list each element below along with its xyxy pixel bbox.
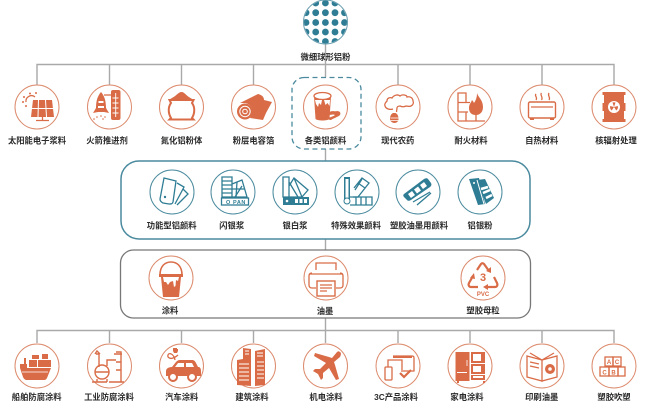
item: plastic toys: C	[602, 370, 607, 376]
item: printing ink	[520, 344, 564, 402]
item: fire resistant material: 耐火材料	[454, 136, 488, 146]
item: solar paste	[8, 85, 67, 146]
item: flash silver paste: 闪银浆	[219, 220, 245, 230]
item: aluminium nitride powder: 氮化铝粉体	[161, 136, 203, 146]
item: functional aluminium pigment: 功能型铝颜料	[147, 220, 197, 230]
item: home appliance coating: 家电涂料	[450, 392, 484, 402]
item: plastic and ink pigment: 塑胶油墨用颜料	[390, 220, 449, 230]
item: functional aluminium pigment	[147, 170, 197, 230]
item: architectural coating: 建筑涂料	[235, 392, 269, 402]
item: automotive coating: 汽车涂料	[165, 392, 199, 402]
item: PVC recycling: 塑胶母粒	[466, 306, 500, 316]
item: special effect pigment: 特殊效果颜料	[331, 220, 382, 230]
item: flash silver paste	[211, 170, 255, 230]
item: marine anticorrosive coating	[12, 344, 62, 402]
item: home appliance coating	[448, 344, 492, 402]
item: ink printer	[304, 256, 348, 316]
item: automotive coating	[160, 344, 204, 402]
item: rocket propellant	[86, 85, 132, 146]
panel: application media	[120, 250, 530, 318]
root node: spherical aluminium powder	[303, 0, 348, 45]
icon: sphere dots	[303, 0, 348, 45]
item: self-heating material: 自热材料	[525, 136, 559, 146]
callout: highlighted pigment category	[292, 78, 361, 149]
item: aluminium silver powder: 铝银粉	[468, 220, 493, 230]
item: PVC recycling: PVC	[477, 292, 490, 298]
item: silver white paste: 银白浆	[283, 220, 308, 230]
item: aluminium silver powder	[458, 170, 502, 230]
item: powder layer capacitor foil	[232, 85, 276, 146]
item: architectural coating	[232, 344, 276, 402]
item: nuclear radiation treatment	[592, 85, 637, 146]
item: plastic toys: 塑胶吹塑	[597, 392, 631, 402]
item: coating bucket	[149, 256, 193, 316]
item: 3C product coating: 3C产品涂料	[374, 392, 419, 402]
item: special effect pigment	[331, 170, 382, 230]
item: pigments	[304, 85, 348, 146]
item: plastic toys: C	[615, 360, 620, 366]
title: 微细球形铝粉	[301, 52, 351, 62]
item: plastic toys: B	[611, 370, 616, 376]
item: 3C product coating	[374, 344, 420, 402]
item: PVC recycling	[461, 256, 505, 316]
item: plastic toys	[592, 344, 636, 402]
item: marine anticorrosive coating: 船舶防腐涂料	[12, 392, 62, 402]
item: silver white paste	[273, 170, 317, 230]
item: powder layer capacitor foil: 粉层电容箔	[233, 136, 274, 146]
item: printing ink: 印刷油墨	[525, 392, 558, 402]
item: fire resistant material	[448, 85, 492, 146]
item: flash silver paste: O PAN	[226, 200, 246, 206]
item: nuclear radiation treatment: 核辐射处理	[595, 136, 637, 146]
item: pigments: 各类铝颜料	[305, 136, 347, 146]
item: electromechanical coating: 机电涂料	[309, 392, 343, 402]
item: electromechanical coating	[304, 344, 348, 402]
item: plastic and ink pigment	[390, 170, 449, 230]
item: industrial anticorrosive coating: 工业防腐涂料	[84, 392, 135, 402]
connector lines	[37, 44, 614, 343]
item: self-heating material	[520, 85, 564, 146]
panel: pigment types	[121, 161, 530, 239]
item: coating bucket: 涂料	[162, 306, 179, 316]
item: modern pesticide	[376, 85, 420, 146]
item: solar paste: 太阳能电子浆料	[8, 136, 67, 146]
item: industrial anticorrosive coating	[84, 344, 135, 402]
item: modern pesticide: 现代农药	[381, 136, 414, 146]
item: rocket propellant: 火箭推进剂	[86, 136, 128, 146]
item: PVC recycling: 3	[480, 272, 486, 284]
item: ink printer: 油墨	[317, 306, 333, 316]
item: plastic toys: A	[607, 360, 612, 366]
item: aluminium nitride powder	[160, 85, 204, 146]
